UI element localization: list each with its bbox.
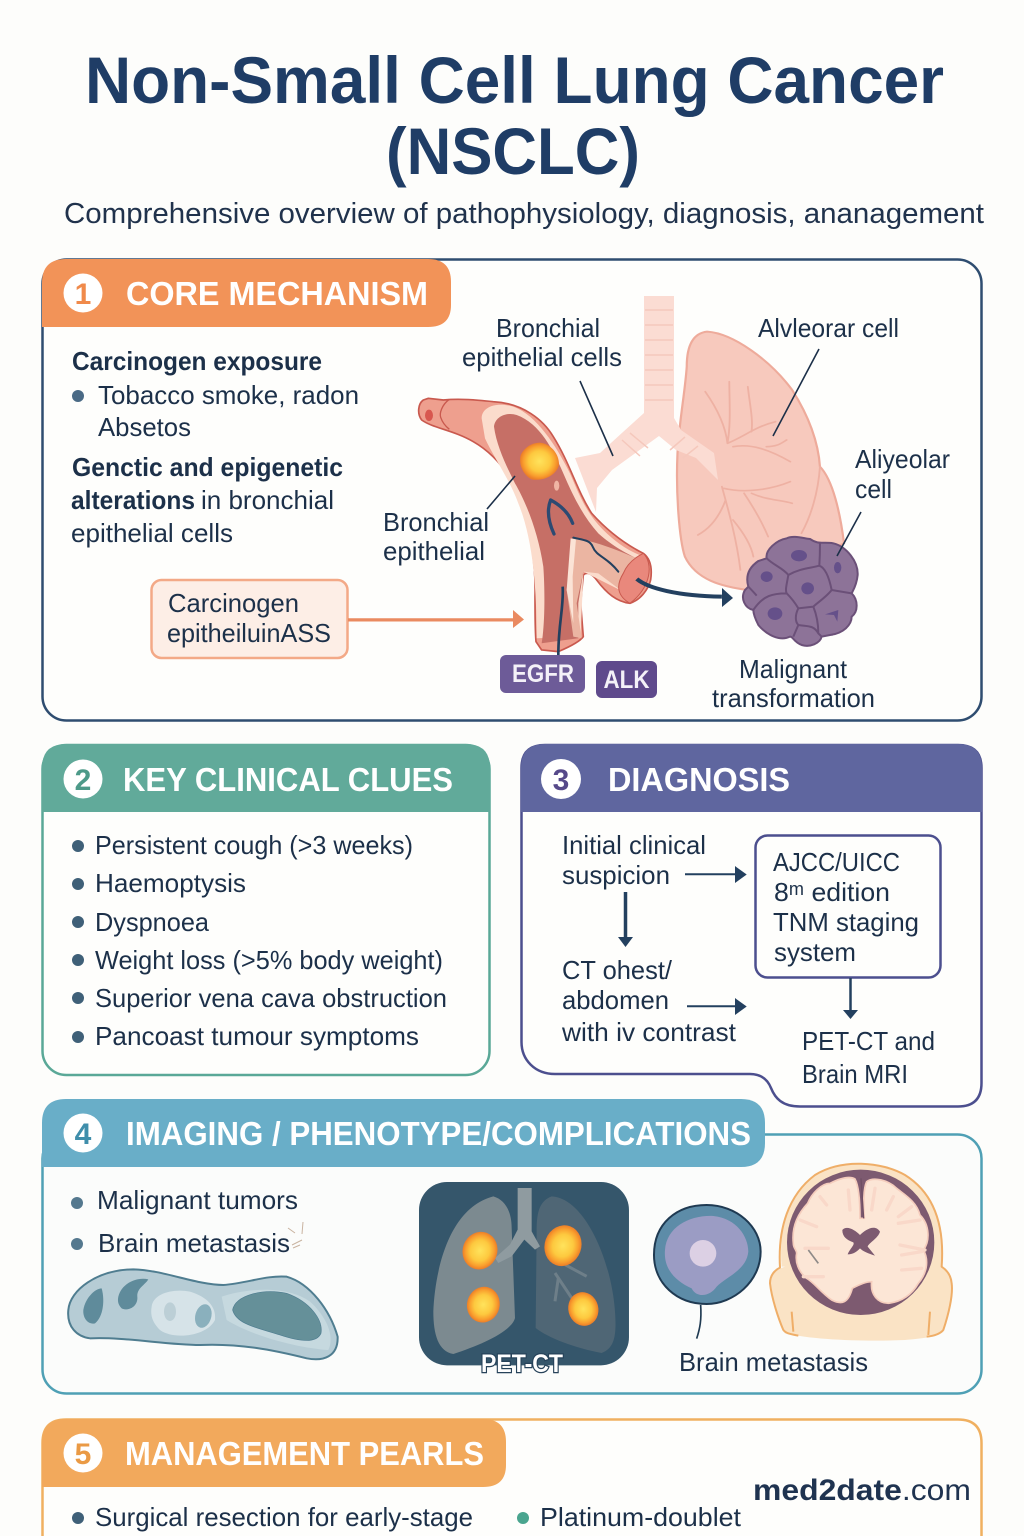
labels: anatomy: cell [855,474,892,504]
list: surgical: Surgical resection for early-stage [95,1502,473,1532]
labels: anatomy: epithelial cells [462,342,622,372]
text block: genetic alterations: Genctic and epigenetic [72,452,343,482]
text: initial clinical suspicion: suspicion [562,860,670,890]
text block: genetic alterations: in bronchial [201,485,334,515]
text block: carcinogen exposure [72,346,359,442]
badge: ALK [596,661,657,698]
illustration: bronchus with tumour [419,398,651,655]
callout: carcinogen box: epitheiluinASS [167,618,331,648]
text: initial clinical suspicion [562,830,706,890]
arrowhead: transformation [722,588,733,607]
arrow: suspicion to CT [624,892,627,940]
panel: diagnosis [521,744,982,1106]
title [85,43,944,188]
text: PET-CT and brain MRI: PET-CT and [802,1026,935,1056]
illustration: metastasis lesion [654,1205,761,1339]
section header: core mechanism [42,259,451,327]
section header: management pearls [42,1419,506,1487]
text block: genetic alterations [71,452,343,548]
list: symptoms: Weight loss (>5% body weight) [95,945,443,975]
section header: imaging: IMAGING / PHENOTYPE/COMPLICATIONS [126,1115,751,1152]
box: TNM staging: 8ᵐ edition [774,877,890,907]
list: imaging findings [71,1185,303,1258]
panel: management pearls [42,1419,982,1536]
label: brain metastasis: Brain metastasis [679,1347,868,1377]
labels: anatomy: Bronchial [496,313,600,343]
panel frame [42,260,982,720]
arrow: carcinogen to bronchus [348,610,524,628]
badge: EGFR [500,655,585,693]
watermark: med2date.com: med2date .com [753,1474,971,1507]
section header: diagnosis: DIAGNOSIS [608,761,790,798]
text block: genetic alterations: epithelial cells [71,518,233,548]
list: imaging findings: Brain metastasis [98,1228,290,1258]
text: PET-CT and brain MRI: Brain MRI [802,1059,908,1089]
illustration: tissue cross-section [68,1269,338,1359]
list: systemic therapy: Platinum-doublet [540,1502,742,1532]
arrow: transformation [637,579,722,597]
panel frame [42,1420,982,1536]
subtitle: Comprehensive overview of pathophysiology, diagnosis, ananagement [64,198,984,230]
list: symptoms: Dyspnoea [95,907,210,937]
text: PET-CT and brain MRI [802,1026,935,1089]
box: TNM staging: TNM staging [773,907,919,937]
illustration: malignant tumour cluster [743,537,858,646]
callout: carcinogen box: Carcinogen [168,588,299,618]
section header: diagnosis: 3 [553,764,569,797]
panel frame [42,1134,982,1394]
box: TNM staging: AJCC/UICC [773,847,900,877]
box: TNM staging: system [774,937,856,967]
labels: anatomy: Bronchial [383,507,489,537]
label: PET-CT: PET-CT [481,1350,563,1378]
list: symptoms [72,830,447,1051]
arrowhead: suspicion to CT [618,937,633,947]
section header: clinical clues [42,744,490,812]
labels: anatomy: Malignant [739,654,848,684]
illustration: PET-CT scan [419,1182,629,1378]
panel frame [42,745,490,1075]
list: symptoms: Superior vena cava obstruction [95,983,447,1013]
text block: carcinogen exposure: Carcinogen exposure [72,346,322,376]
arrow: staging to PET [849,978,852,1012]
text block: genetic alterations: alterations [71,485,195,515]
panel: imaging phenotype complications [42,1099,982,1394]
illustration: brain MRI [770,1164,952,1341]
panel: core mechanism [42,259,982,720]
badge: ALK: ALK [604,666,650,694]
list: symptoms: Pancoast tumour symptoms [95,1021,419,1051]
panel frame [522,745,982,1106]
list: symptoms: Persistent cough (>3 weeks) [95,830,413,860]
box: TNM staging [756,836,940,978]
section header: imaging [42,1099,765,1167]
title: Non-Small Cell Lung Cancer [85,43,944,117]
labels: anatomy: transformation [712,683,875,713]
labels: anatomy: Aliyeolar [855,444,950,474]
text block: carcinogen exposure: Tobacco smoke, radon [98,380,359,410]
labels: anatomy: epithelial [383,536,485,566]
callout: carcinogen box [152,580,348,658]
panel: key clinical clues [42,744,490,1075]
text: CT chest abdomen: abdomen [562,985,669,1015]
text: CT chest abdomen: CT ohest/ [562,955,673,985]
list: imaging findings: Malignant tumors [97,1185,298,1215]
illustration: lung [575,296,844,590]
title: (NSCLC) [386,114,640,188]
badge: EGFR: EGFR [512,660,574,688]
section header: clinical clues: KEY CLINICAL CLUES [123,761,453,798]
labels: anatomy: Alvleorar cell [758,313,899,343]
section header: diagnosis [521,744,982,812]
section header: clinical clues: 2 [75,764,91,797]
arrowhead: staging to PET [843,1010,858,1019]
text block: carcinogen exposure: Absetos [98,412,191,442]
section header: management pearls: 5 [75,1438,91,1471]
labels: anatomy [383,313,950,713]
arrow: CT to PET [687,1000,745,1013]
section header: imaging: 4 [75,1118,92,1151]
text: initial clinical suspicion: Initial clinical [562,830,706,860]
arrow: suspicion to staging [685,868,745,881]
text: CT chest abdomen: with iv contrast [561,1017,737,1047]
list: symptoms: Haemoptysis [95,868,246,898]
section header: management pearls: MANAGEMENT PEARLS [125,1435,484,1472]
section header: core mechanism: 1 [75,278,91,311]
text: CT chest abdomen [561,955,737,1047]
section header: core mechanism: CORE MECHANISM [126,275,428,312]
